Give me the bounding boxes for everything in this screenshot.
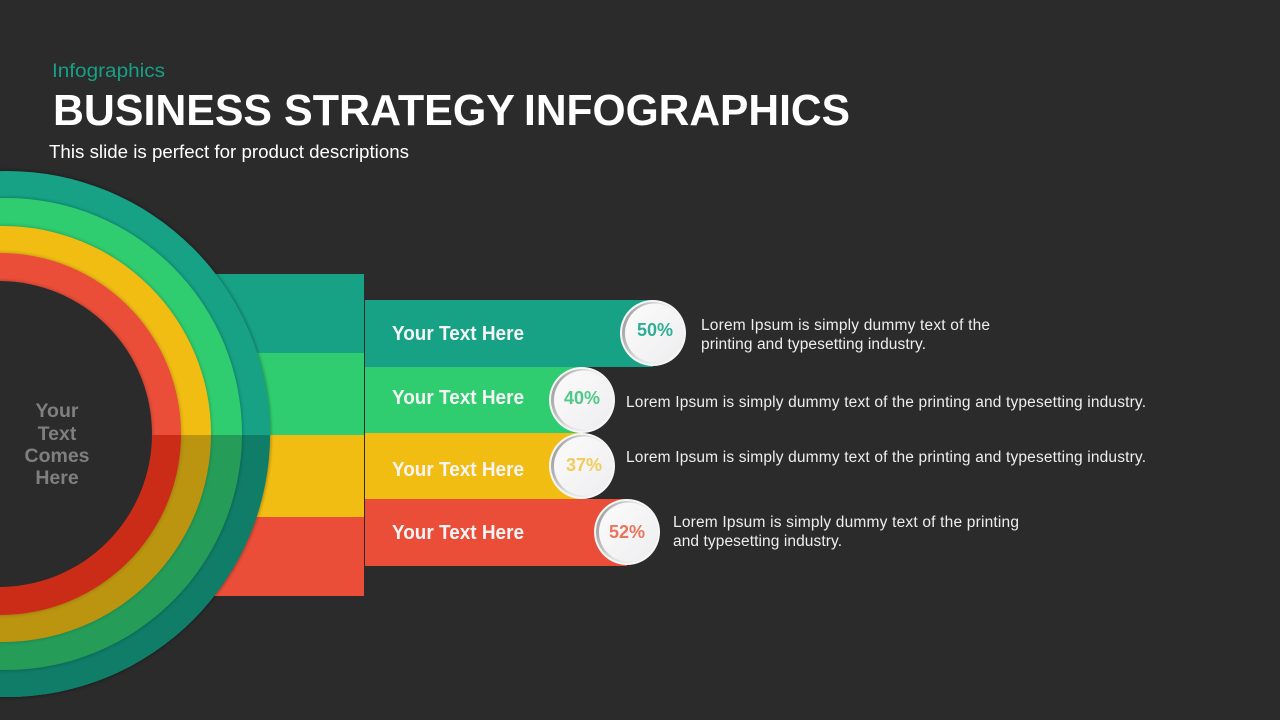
row 3: yellow bar: 37%: [566, 455, 602, 475]
title: INFOGRAPHICS: [524, 86, 850, 135]
row 3: yellow bar: Lorem Ipsum is simply dummy text of the printing and typesetting industry.: [626, 449, 1146, 466]
row 1: teal bar: 50%: [637, 320, 673, 340]
title: STRATEGY: [284, 86, 515, 135]
centre text: Your: [36, 400, 79, 422]
row 1: teal bar: [365, 300, 990, 367]
row 1: teal bar: Lorem Ipsum is simply dummy text of the: [701, 317, 990, 334]
row 4: red bar: 52%: [609, 522, 645, 542]
row 3: yellow bar: Your Text Here: [392, 459, 524, 481]
row 4: red bar: Your Text Here: [392, 522, 524, 544]
eyebrow label: Infographics: [52, 61, 165, 82]
row 1: teal bar: Your Text Here: [392, 323, 524, 345]
row 1: teal bar: printing and typesetting industry.: [701, 336, 926, 353]
row 2: green bar: Lorem Ipsum is simply dummy text of the printing and typesetting industry.: [626, 394, 1146, 411]
row 3: yellow bar: [365, 433, 1146, 499]
row 2: green bar: Your Text Here: [392, 387, 524, 409]
title: [53, 86, 850, 135]
row 2: green bar: [365, 367, 1146, 433]
centre text: Comes: [24, 445, 90, 467]
row 4: red bar: Lorem Ipsum is simply dummy text of the printing: [673, 514, 1019, 531]
centre text: [24, 400, 90, 489]
lower half shading of rings: [0, 435, 270, 697]
row 4: red bar: and typesetting industry.: [673, 533, 842, 550]
centre text: Text: [38, 423, 77, 445]
row 2: green bar: 40%: [564, 388, 600, 408]
centre text: Here: [35, 467, 79, 489]
concentric rings: [0, 170, 271, 698]
subtitle: This slide is perfect for product descriptions: [49, 141, 409, 162]
back bars: [200, 274, 364, 596]
row 4: red bar: [365, 499, 1019, 566]
title: BUSINESS: [53, 86, 272, 135]
